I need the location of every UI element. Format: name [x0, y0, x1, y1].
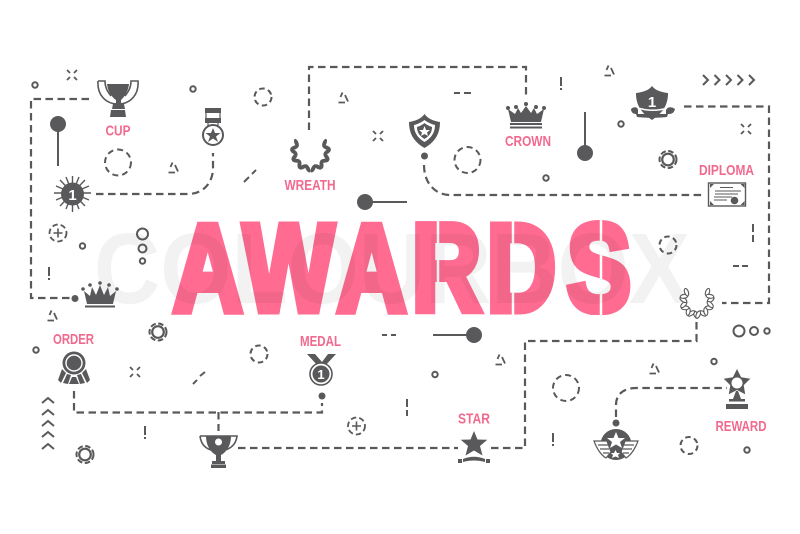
icon: trophy	[200, 436, 237, 468]
icon: shield	[409, 114, 440, 148]
dashed circles	[105, 147, 579, 401]
chevrons right	[703, 75, 754, 85]
icon: medal with star	[203, 108, 223, 145]
connector: ribbon badge to laurel	[684, 106, 769, 303]
chips	[76, 151, 676, 463]
label: wreath: WREATH	[284, 177, 336, 194]
label: diploma: DIPLOMA	[699, 162, 754, 179]
title: AWARDS: A	[337, 200, 406, 337]
connector: branch to trophy	[217, 412, 220, 431]
icon: number one burst: 1	[68, 187, 77, 204]
icon: diploma	[708, 183, 746, 206]
small dashed circles	[250, 88, 698, 454]
title: AWARDS: W	[243, 200, 334, 337]
title: AWARDS	[171, 220, 630, 315]
icon: crown	[506, 102, 546, 128]
plus marks	[50, 224, 365, 434]
icon: order crown	[81, 281, 119, 308]
lollipop marker left	[50, 116, 66, 166]
title: AWARDS: A	[173, 200, 242, 337]
winged badge connector dot	[612, 420, 620, 426]
x marks	[67, 70, 751, 377]
icon: number one burst	[54, 176, 91, 212]
connector: wreath to crown	[309, 67, 526, 130]
lollipop marker center	[357, 194, 407, 210]
lollipop marker crown side	[577, 112, 593, 161]
icon: medal one: 1	[317, 367, 325, 382]
label: reward: REWARD	[716, 418, 767, 435]
title: AWARDS: D	[487, 200, 556, 337]
icon: rosette order	[58, 352, 90, 384]
icon: ribbon badge one: 1	[648, 94, 656, 111]
connector: badge to medal	[96, 153, 213, 194]
icon: cup	[98, 81, 138, 117]
watermark: COLOURBOX	[94, 213, 690, 325]
ring group right	[734, 326, 770, 336]
icon: star with ribbon	[458, 431, 490, 463]
order crown connector dot	[72, 295, 78, 302]
connector: shield to diploma	[424, 165, 704, 195]
connector: laurel to star	[487, 322, 696, 448]
label: crown: CROWN	[505, 133, 551, 150]
icon: medal one	[307, 354, 336, 385]
shield connector dot	[421, 152, 428, 160]
chevrons up	[42, 398, 54, 449]
icon: star reward	[724, 369, 750, 409]
icon: wreath	[288, 137, 333, 174]
label: cup: CUP	[106, 122, 130, 140]
medal connector dot	[318, 392, 326, 400]
title: AWARDS: R	[412, 200, 481, 337]
decorative rings	[32, 82, 750, 453]
label: order: ORDER	[53, 331, 94, 348]
connector: cup to crown of order	[31, 99, 89, 298]
icon: ribbon badge one	[631, 86, 675, 120]
triangles	[48, 66, 659, 374]
icon: winged star badge	[594, 429, 638, 460]
exclamation marks	[49, 77, 561, 446]
label: medal: MEDAL	[300, 333, 341, 350]
label: star: STAR	[458, 410, 490, 428]
connector: order to medal	[74, 391, 322, 412]
icon: laurel outline	[678, 287, 716, 320]
lollipop marker lower	[433, 327, 482, 343]
title: AWARDS: S	[567, 200, 631, 337]
ring group left	[137, 228, 148, 264]
connector: trophy to star	[238, 447, 458, 449]
connector: winged badge to reward	[616, 388, 727, 417]
short dashes	[193, 93, 753, 416]
